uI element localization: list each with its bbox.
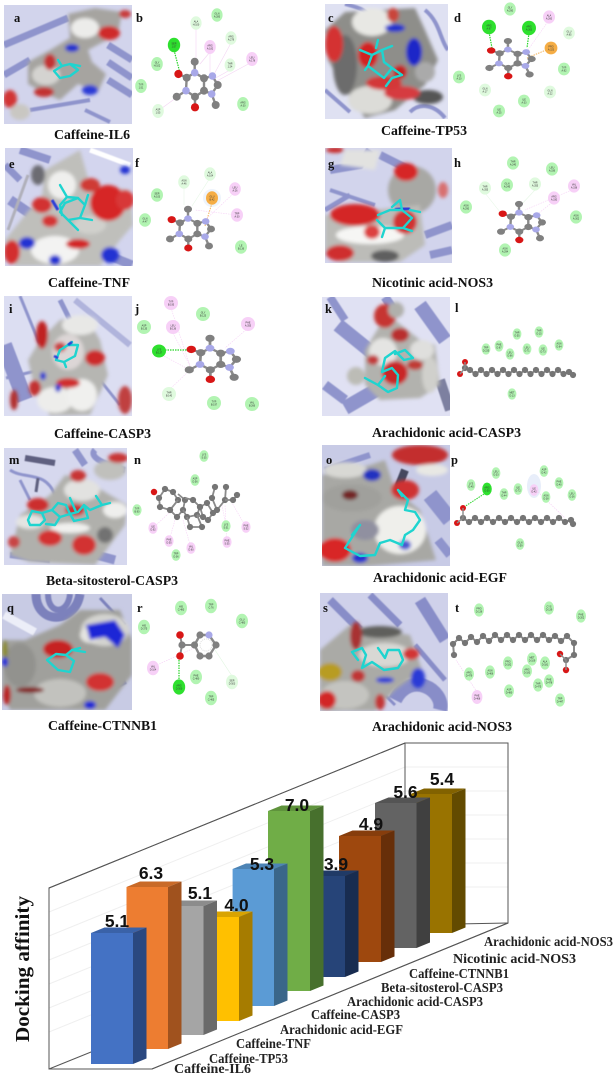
- panel p: Arachidonic acid-EGF interaction diagram: ARG: [484, 486, 490, 490]
- panel l: Arachidonic acid-CASP3 interaction diagram: THR: [537, 330, 541, 332]
- panel l: Arachidonic acid-CASP3 interaction diagram: D:55: [514, 334, 520, 338]
- panel t: Arachidonic acid-NOS3 interaction diagram: D:479: [466, 674, 473, 678]
- label p: p: [451, 453, 458, 467]
- panel d: Caffeine-TP53 interaction diagram: A:22: [548, 92, 553, 96]
- panel d: Caffeine-TP53 interaction diagram: TYR: [562, 66, 566, 70]
- panel q: Caffeine-CTNNB1 docking surface: [2, 594, 132, 710]
- caption: Caffeine-CASP3: Caffeine-CASP3: [54, 426, 151, 441]
- panel d: Caffeine-TP53 interaction diagram: A:97: [487, 28, 492, 30]
- panel t: Arachidonic acid-NOS3 interaction diagram: PRO: [505, 660, 511, 664]
- panel b: Caffeine-IL6 interaction diagram: 1:57: [172, 46, 177, 48]
- panel t: Arachidonic acid-NOS3 interaction diagram: D:468: [474, 698, 481, 700]
- chart: docking affinity 3D bar chart: [12, 743, 613, 1075]
- panel h: Nicotinic acid-NOS3 interaction diagram: A:302: [573, 218, 580, 220]
- panel r: Caffeine-CTNNB1 interaction diagram: D:375: [141, 628, 148, 630]
- panel d: Caffeine-TP53 interaction diagram: GLU: [567, 30, 571, 34]
- label d: d: [454, 11, 461, 25]
- panel h: Nicotinic acid-NOS3 interaction diagram: THR: [511, 160, 515, 164]
- panel r: Caffeine-CTNNB1 interaction diagram: ARG: [176, 684, 182, 688]
- x axis labels: Beta-sitosterol-CASP3: [381, 980, 503, 995]
- panel p: Arachidonic acid-EGF interaction diagram: D:50: [484, 490, 490, 492]
- panel l: Arachidonic acid-CASP3 interaction diagram: D:66: [507, 354, 513, 358]
- label h: h: [454, 156, 461, 170]
- bar: Caffeine-TP53: [126, 882, 182, 1049]
- panel n: Beta-sitosterol-CASP3 interaction diagram: D:56: [192, 480, 198, 484]
- x axis labels: Caffeine-CTNNB1: [409, 966, 509, 981]
- panel f: Caffeine-TNF interaction diagram: B:136: [238, 248, 245, 250]
- panel n: Beta-sitosterol-CASP3 interaction diagram: [132, 450, 251, 561]
- caption: Arachidonic acid-EGF: Arachidonic acid-EGF: [373, 570, 507, 585]
- panel p: Arachidonic acid-EGF interaction diagram: LYS: [469, 482, 473, 486]
- panel l: Arachidonic acid-CASP3 interaction diagram: D:15: [536, 332, 542, 336]
- panel p: Arachidonic acid-EGF interaction diagram: D:72: [515, 490, 521, 492]
- panel b: Caffeine-IL6 interaction diagram: GLY: [155, 62, 159, 64]
- panel t: Arachidonic acid-NOS3 interaction diagram: D:136: [476, 610, 483, 614]
- panel h: Nicotinic acid-NOS3 interaction diagram: A:338: [571, 186, 578, 190]
- x axis labels: Nicotinic acid-NOS3: [453, 951, 576, 966]
- x axis labels: Caffeine-CASP3: [311, 1007, 400, 1022]
- data values: 5.1: [105, 911, 129, 931]
- label n: n: [134, 453, 141, 467]
- panel h: Nicotinic acid-NOS3 interaction diagram: ASN: [464, 204, 468, 208]
- panel n: Beta-sitosterol-CASP3 interaction diagram: D:60: [188, 548, 194, 552]
- panel f: Caffeine-TNF interaction diagram: GLN: [143, 218, 147, 220]
- bar: Caffeine-TNF: [162, 900, 217, 1035]
- panel c: Caffeine-TP53 docking surface: [325, 4, 448, 119]
- panel r: Caffeine-CTNNB1 interaction diagram: C:483: [239, 622, 246, 624]
- panel n: Beta-sitosterol-CASP3 interaction diagram: S:51: [224, 526, 229, 530]
- panel g: Nicotinic acid-NOS3 docking surface: [325, 148, 452, 263]
- panel t: Arachidonic acid-NOS3 interaction diagram: THR: [536, 682, 540, 686]
- panel f: Caffeine-TNF interaction diagram: A:47: [143, 220, 148, 224]
- panel d: Caffeine-TP53 interaction diagram: A:290: [507, 10, 514, 12]
- data values: 4.0: [224, 895, 249, 915]
- panel j: Caffeine-CASP3 interaction diagram: B:195: [168, 304, 175, 306]
- panel f: Caffeine-TNF interaction diagram: TRP: [235, 212, 239, 216]
- label q: q: [7, 601, 14, 615]
- label b: b: [136, 11, 143, 25]
- panel d: Caffeine-TP53 interaction diagram: ALA: [547, 14, 551, 18]
- panel j: Caffeine-CASP3 interaction diagram: B:125: [200, 314, 207, 318]
- panel r: Caffeine-CTNNB1 interaction diagram: PHE: [194, 674, 198, 678]
- panel l: Arachidonic acid-CASP3 interaction diagram: D:73: [540, 350, 546, 354]
- caption: Caffeine-TNF: Caffeine-TNF: [48, 275, 130, 290]
- panel h: Nicotinic acid-NOS3 interaction diagram: GLN: [505, 182, 509, 186]
- caption: Caffeine-CTNNB1: Caffeine-CTNNB1: [48, 718, 157, 733]
- panel d: Caffeine-TP53 interaction diagram: ILE: [497, 108, 501, 112]
- bar: Arachidonic acid-NOS3: [410, 788, 466, 933]
- panel n: Beta-sitosterol-CASP3 interaction diagram: D:92: [150, 528, 156, 532]
- panel d: Caffeine-TP53 interaction diagram: A:20: [457, 78, 462, 80]
- panel d: Caffeine-TP53 interaction diagram: A:25: [497, 112, 502, 114]
- bar: Caffeine-CASP3: [233, 864, 288, 1006]
- panel f: Caffeine-TNF interaction diagram: A:104: [207, 174, 214, 178]
- label e: e: [9, 157, 15, 171]
- panel n: Beta-sitosterol-CASP3 interaction diagram: LYS: [224, 524, 228, 526]
- panel d: Caffeine-TP53 interaction diagram: ARG: [486, 24, 492, 28]
- panel j: Caffeine-CASP3 interaction diagram: TYR: [169, 300, 173, 304]
- panel l: Arachidonic acid-CASP3 interaction diagram: ILE: [541, 348, 545, 350]
- panel t: Arachidonic acid-NOS3 interaction diagram: ASN: [488, 670, 492, 672]
- panel n: Beta-sitosterol-CASP3 interaction diagram: D:55: [166, 542, 172, 544]
- y axis title: Docking affinity: [12, 896, 34, 1042]
- panel p: Arachidonic acid-EGF interaction diagram: PHE: [557, 480, 561, 484]
- panel h: Nicotinic acid-NOS3 interaction diagram: THR: [533, 182, 537, 184]
- panel j: Caffeine-CASP3 interaction diagram: ASP: [142, 324, 146, 328]
- panel f: Caffeine-TNF interaction diagram: [139, 167, 247, 254]
- panel j: Caffeine-CASP3 interaction diagram: B:136: [170, 328, 177, 330]
- label c: c: [328, 11, 334, 25]
- panel d: Caffeine-TP53 interaction diagram: A:92: [562, 70, 567, 72]
- panel t: Arachidonic acid-NOS3 interaction diagram: D:447: [557, 700, 564, 704]
- panel p: Arachidonic acid-EGF interaction diagram: THR: [502, 492, 506, 494]
- panel t: Arachidonic acid-NOS3 interaction diagram: MET: [529, 656, 535, 660]
- panel j: Caffeine-CASP3 interaction diagram: TYR: [212, 400, 216, 404]
- panel b: Caffeine-IL6 interaction diagram: ALA: [194, 20, 198, 24]
- panel r: Caffeine-CTNNB1 interaction diagram: VAL: [151, 666, 155, 668]
- panel b: Caffeine-IL6 interaction diagram: [135, 8, 258, 118]
- caption: Arachidonic acid-NOS3: Arachidonic acid-NOS3: [372, 719, 512, 734]
- panel b: Caffeine-IL6 interaction diagram: H:102: [154, 64, 161, 68]
- panel d: Caffeine-TP53 interaction diagram: LYS: [457, 74, 461, 78]
- panel d: Caffeine-TP53 interaction diagram: A:17: [483, 90, 488, 94]
- panel p: Arachidonic acid-EGF interaction diagram: D:59: [517, 544, 523, 548]
- panel d: Caffeine-TP53 interaction diagram: A:33: [522, 102, 527, 104]
- panel h: Nicotinic acid-NOS3 interaction diagram: VAL: [572, 184, 576, 186]
- x axis labels: Caffeine-TNF: [236, 1036, 311, 1051]
- panel l: Arachidonic acid-CASP3 interaction diagram: D:13: [509, 394, 515, 398]
- x axis labels: Arachidonic acid-EGF: [280, 1022, 403, 1037]
- panel j: Caffeine-CASP3 interaction diagram: [137, 296, 259, 411]
- panel j: Caffeine-CASP3 interaction diagram: LYS: [157, 348, 161, 352]
- label i: i: [9, 302, 13, 316]
- panel n: Beta-sitosterol-CASP3 interaction diagram: B:90: [135, 510, 140, 514]
- panel h: Nicotinic acid-NOS3 interaction diagram: [460, 156, 582, 257]
- panel i: Caffeine-CASP3 docking surface: [4, 296, 132, 416]
- caption: Nicotinic acid-NOS3: Nicotinic acid-NOS3: [372, 275, 493, 290]
- panel b: Caffeine-IL6 interaction diagram: ARG: [240, 102, 246, 104]
- panel f: Caffeine-TNF interaction diagram: B:42: [210, 198, 215, 202]
- panel r: Caffeine-CTNNB1 interaction diagram: D:503: [229, 682, 236, 686]
- panel j: Caffeine-CASP3 interaction diagram: B:266: [249, 404, 256, 408]
- panel j: Caffeine-CASP3 interaction diagram: GLY: [201, 312, 205, 314]
- panel h: Nicotinic acid-NOS3 interaction diagram: ASN: [503, 248, 507, 250]
- bar: Arachidonic acid-EGF: [197, 912, 252, 1021]
- panel f: Caffeine-TNF interaction diagram: A:26: [233, 190, 238, 192]
- panel t: Arachidonic acid-NOS3 interaction diagram: D:182: [505, 664, 512, 666]
- x axis labels: Caffeine-TP53: [209, 1051, 288, 1066]
- data values: 6.3: [139, 863, 163, 883]
- panel f: Caffeine-TNF interaction diagram: SER: [155, 192, 159, 196]
- panel h: Nicotinic acid-NOS3 interaction diagram: ARG: [551, 196, 557, 198]
- panel p: Arachidonic acid-EGF interaction diagram: ILE: [516, 486, 520, 490]
- panel n: Beta-sitosterol-CASP3 interaction diagram: S:52: [244, 528, 249, 530]
- panel h: Nicotinic acid-NOS3 interaction diagram: A:240: [510, 164, 517, 166]
- data values: 5.4: [430, 769, 454, 789]
- panel r: Caffeine-CTNNB1 interaction diagram: SER: [230, 680, 234, 682]
- panel t: Arachidonic acid-NOS3 interaction diagram: PRO: [476, 608, 482, 610]
- panel l: Arachidonic acid-CASP3 interaction diagram: ASN: [557, 342, 561, 346]
- panel f: Caffeine-TNF interaction diagram: GLU: [210, 196, 214, 198]
- panel t: Arachidonic acid-NOS3 interaction diagram: D:139: [546, 608, 553, 612]
- panel l: Arachidonic acid-CASP3 interaction diagram: D:235: [483, 350, 490, 352]
- panel t: Arachidonic acid-NOS3 interaction diagram: D:183: [524, 672, 531, 674]
- panel d: Caffeine-TP53 interaction diagram: GLN: [483, 88, 487, 90]
- panel b: Caffeine-IL6 interaction diagram: TYR: [139, 84, 143, 86]
- panel t: Arachidonic acid-NOS3 interaction diagram: D:480: [506, 692, 513, 694]
- panel p: Arachidonic acid-EGF interaction diagram: LEU: [570, 492, 574, 496]
- label m: m: [9, 453, 20, 467]
- panel j: Caffeine-CASP3 interaction diagram: LEU: [171, 324, 175, 328]
- panel f: Caffeine-TNF interaction diagram: LEU: [233, 186, 237, 190]
- panel b: Caffeine-IL6 interaction diagram: 1:24: [228, 66, 233, 68]
- panel a: Caffeine-IL6 docking surface: [4, 5, 132, 124]
- panel p: Arachidonic acid-EGF interaction diagram: ASN: [544, 494, 548, 498]
- panel r: Caffeine-CTNNB1 interaction diagram: TRP: [209, 696, 213, 698]
- label a: a: [14, 11, 21, 25]
- panel d: Caffeine-TP53 interaction diagram: A:323: [548, 48, 555, 52]
- bar: Caffeine-IL6: [91, 928, 146, 1064]
- panel d: Caffeine-TP53 interaction diagram: [453, 2, 575, 117]
- panel p: Arachidonic acid-EGF interaction diagram: ASP: [542, 468, 546, 472]
- panel l: Arachidonic acid-CASP3 interaction diagram: THR: [515, 332, 519, 334]
- panel d: Caffeine-TP53 interaction diagram: PRO: [548, 46, 554, 48]
- panel p: Arachidonic acid-EGF interaction diagram: [454, 465, 576, 550]
- label o: o: [326, 453, 332, 467]
- panel d: Caffeine-TP53 interaction diagram: ARG: [526, 26, 532, 28]
- label l: l: [455, 301, 459, 315]
- panel r: Caffeine-CTNNB1 interaction diagram: TRP: [209, 604, 213, 606]
- panel n: Beta-sitosterol-CASP3 interaction diagram: ASP: [193, 478, 197, 480]
- panel n: Beta-sitosterol-CASP3 interaction diagram: D:06: [173, 556, 179, 558]
- panel n: Beta-sitosterol-CASP3 interaction diagram: TRP: [174, 552, 178, 556]
- panel p: Arachidonic acid-EGF interaction diagram: D:44: [501, 494, 507, 498]
- bar: Beta-sitosterol-CASP3: [303, 870, 358, 977]
- panel b: Caffeine-IL6 interaction diagram: A:279: [228, 38, 235, 42]
- panel f: Caffeine-TNF interaction diagram: A:30: [235, 216, 240, 218]
- panel n: Beta-sitosterol-CASP3 interaction diagram: PHE: [225, 540, 229, 542]
- label f: f: [135, 156, 140, 170]
- panel b: Caffeine-IL6 interaction diagram: A:178: [249, 60, 256, 62]
- panel d: Caffeine-TP53 interaction diagram: GLY: [508, 6, 512, 10]
- panel n: Beta-sitosterol-CASP3 interaction diagram: TYR: [135, 508, 139, 510]
- panel r: Caffeine-CTNNB1 interaction diagram: [138, 599, 248, 705]
- caption: Beta-sitosterol-CASP3: Beta-sitosterol-CASP3: [46, 573, 178, 588]
- panel f: Caffeine-TNF interaction diagram: A:46: [182, 182, 187, 186]
- panel h: Nicotinic acid-NOS3 interaction diagram: LEU: [550, 166, 554, 170]
- panel b: Caffeine-IL6 interaction diagram: LEU: [250, 56, 254, 60]
- panel b: Caffeine-IL6 interaction diagram: ASP: [156, 108, 160, 112]
- panel j: Caffeine-CASP3 interaction diagram: PHE: [246, 322, 250, 324]
- bar: Nicotinic acid-NOS3: [375, 798, 430, 948]
- panel p: Arachidonic acid-EGF interaction diagram: GLN: [518, 542, 522, 544]
- panel r: Caffeine-CTNNB1 interaction diagram: HIS: [142, 624, 146, 628]
- panel o: Arachidonic acid-EGF docking surface: [322, 445, 450, 566]
- panel l: Arachidonic acid-CASP3 interaction diagram: [457, 326, 573, 400]
- panel r: Caffeine-CTNNB1 interaction diagram: D:500: [176, 688, 183, 690]
- panel t: Arachidonic acid-NOS3 interaction diagram: ALA: [543, 660, 547, 664]
- panel h: Nicotinic acid-NOS3 interaction diagram: A:330: [551, 198, 558, 202]
- caption: Caffeine-IL6: Caffeine-IL6: [54, 127, 130, 142]
- label k: k: [325, 302, 332, 316]
- data values: 5.1: [188, 883, 212, 903]
- panel p: Arachidonic acid-EGF interaction diagram: D:45: [468, 486, 474, 488]
- panel t: Arachidonic acid-NOS3 interaction diagram: D:109: [529, 660, 536, 662]
- panel h: Nicotinic acid-NOS3 interaction diagram: A:336: [549, 170, 556, 172]
- panel l: Arachidonic acid-CASP3 interaction diagram: PHE: [497, 344, 501, 346]
- panel l: Arachidonic acid-CASP3 interaction diagram: D:64: [556, 346, 562, 348]
- panel h: Nicotinic acid-NOS3 interaction diagram: A:355: [482, 188, 489, 192]
- panel r: Caffeine-CTNNB1 interaction diagram: D:104: [150, 668, 157, 672]
- panel b: Caffeine-IL6 interaction diagram: A:283: [214, 16, 221, 18]
- panel t: Arachidonic acid-NOS3 interaction diagram: PHE: [547, 678, 551, 682]
- panel r: Caffeine-CTNNB1 interaction diagram: C:483: [178, 608, 185, 612]
- label g: g: [328, 157, 335, 171]
- panel l: Arachidonic acid-CASP3 interaction diagram: D:67: [496, 346, 502, 350]
- panel p: Arachidonic acid-EGF interaction diagram: D:42: [531, 490, 537, 494]
- panel t: Arachidonic acid-NOS3 interaction diagram: D:202: [578, 616, 585, 620]
- panel h: Nicotinic acid-NOS3 interaction diagram: THR: [483, 186, 487, 188]
- panel d: Caffeine-TP53 interaction diagram: A:260: [546, 18, 553, 20]
- panel f: Caffeine-TNF interaction diagram: ASN: [182, 180, 186, 182]
- panel p: Arachidonic acid-EGF interaction diagram: D:36: [569, 496, 575, 498]
- panel t: Arachidonic acid-NOS3 interaction diagram: [453, 601, 586, 707]
- panel p: Arachidonic acid-EGF interaction diagram: ILE: [532, 488, 536, 490]
- panel l: Arachidonic acid-CASP3 interaction diagram: D:71: [524, 350, 530, 352]
- panel b: Caffeine-IL6 interaction diagram: A:182: [207, 48, 214, 50]
- data values: 7.0: [285, 795, 309, 815]
- panel t: Arachidonic acid-NOS3 interaction diagram: ARG: [466, 672, 472, 674]
- caption: Arachidonic acid-CASP3: Arachidonic acid-CASP3: [372, 425, 521, 440]
- panel t: Arachidonic acid-NOS3 interaction diagram: TRP: [558, 698, 562, 700]
- label r: r: [137, 601, 143, 615]
- caption: Caffeine-TP53: Caffeine-TP53: [381, 123, 467, 138]
- panel p: Arachidonic acid-EGF interaction diagram: D:38: [543, 498, 549, 500]
- data values: 5.6: [393, 782, 418, 802]
- label s: s: [323, 601, 328, 615]
- panel l: Arachidonic acid-CASP3 interaction diagram: MET: [509, 392, 515, 394]
- x axis labels: Arachidonic acid-CASP3: [347, 994, 483, 1009]
- panel t: Arachidonic acid-NOS3 interaction diagram: D:181: [542, 664, 549, 666]
- bar: Caffeine-CTNNB1: [339, 830, 394, 962]
- label t: t: [455, 601, 460, 615]
- panel f: Caffeine-TNF interaction diagram: ALA: [208, 172, 212, 174]
- panel b: Caffeine-IL6 interaction diagram: GLN: [215, 12, 219, 16]
- panel h: Nicotinic acid-NOS3 interaction diagram: A:294: [502, 250, 509, 254]
- panel t: Arachidonic acid-NOS3 interaction diagram: D:478: [546, 682, 553, 684]
- panel h: Nicotinic acid-NOS3 interaction diagram: A:290: [463, 208, 470, 210]
- panel b: Caffeine-IL6 interaction diagram: SER: [172, 42, 176, 46]
- data values: 4.9: [359, 814, 383, 834]
- panel d: Caffeine-TP53 interaction diagram: ILE: [522, 98, 526, 102]
- panel l: Arachidonic acid-CASP3 interaction diagram: LEU: [525, 346, 529, 350]
- panel m: Beta-sitosterol-CASP3 docking surface: [4, 448, 127, 565]
- panel t: Arachidonic acid-NOS3 interaction diagram: PHE: [475, 694, 479, 698]
- panel r: Caffeine-CTNNB1 interaction diagram: C:480: [193, 678, 200, 680]
- panel n: Beta-sitosterol-CASP3 interaction diagram: LYS: [202, 454, 206, 456]
- panel f: Caffeine-TNF interaction diagram: LE: [240, 244, 242, 248]
- panel j: Caffeine-CASP3 interaction diagram: B:197: [211, 404, 218, 406]
- panel t: Arachidonic acid-NOS3 interaction diagram: ASP: [507, 688, 511, 692]
- panel j: Caffeine-CASP3 interaction diagram: B:135: [141, 328, 148, 330]
- panel h: Nicotinic acid-NOS3 interaction diagram: ASN: [574, 214, 578, 218]
- x axis labels: [174, 934, 613, 1075]
- panel b: Caffeine-IL6 interaction diagram: 1:55: [156, 112, 161, 114]
- panel p: Arachidonic acid-EGF interaction diagram: LEU: [494, 470, 498, 474]
- panel l: Arachidonic acid-CASP3 interaction diagram: TRP: [484, 346, 488, 350]
- panel s: Arachidonic acid-NOS3 docking surface: [320, 593, 448, 711]
- data values: 5.3: [250, 854, 274, 874]
- panel p: Arachidonic acid-EGF interaction diagram: D:40: [556, 484, 562, 486]
- panel b: Caffeine-IL6 interaction diagram: ARG: [207, 44, 213, 48]
- panel b: Caffeine-IL6 interaction diagram: 1:51: [139, 86, 144, 90]
- panel j: Caffeine-CASP3 interaction diagram: THR: [167, 392, 171, 394]
- panel t: Arachidonic acid-NOS3 interaction diagram: D:466: [487, 672, 494, 676]
- panel t: Arachidonic acid-NOS3 interaction diagram: PHE: [579, 614, 583, 616]
- panel b: Caffeine-IL6 interaction diagram: A:30: [241, 104, 246, 108]
- data values: [105, 769, 454, 931]
- panel d: Caffeine-TP53 interaction diagram: A:303: [526, 28, 533, 32]
- panel b: Caffeine-IL6 interaction diagram: H:100: [193, 24, 200, 26]
- panel k: Arachidonic acid-CASP3 docking surface: [322, 297, 450, 416]
- panel j: Caffeine-CASP3 interaction diagram: B:137: [156, 352, 163, 354]
- panel t: Arachidonic acid-NOS3 interaction diagram: CYS: [547, 606, 551, 608]
- panel p: Arachidonic acid-EGF interaction diagram: D:33: [493, 474, 499, 476]
- panel t: Arachidonic acid-NOS3 interaction diagram: D:475: [535, 686, 542, 688]
- panel r: Caffeine-CTNNB1 interaction diagram: C:465: [208, 698, 215, 702]
- panel r: Caffeine-CTNNB1 interaction diagram: GLU: [240, 618, 244, 622]
- panel j: Caffeine-CASP3 interaction diagram: B:140: [166, 394, 173, 398]
- panel l: Arachidonic acid-CASP3 interaction diagram: LEU: [508, 352, 512, 354]
- panel r: Caffeine-CTNNB1 interaction diagram: C:76: [208, 606, 214, 610]
- panel d: Caffeine-TP53 interaction diagram: GLN: [548, 90, 552, 92]
- panel d: Caffeine-TP53 interaction diagram: A:85: [567, 34, 572, 36]
- panel r: Caffeine-CTNNB1 interaction diagram: HIS: [179, 606, 183, 608]
- panel b: Caffeine-IL6 interaction diagram: THR: [228, 62, 232, 66]
- panel n: Beta-sitosterol-CASP3 interaction diagram: ILE: [151, 526, 155, 528]
- panel n: Beta-sitosterol-CASP3 interaction diagram: S:55: [225, 542, 230, 546]
- data values: 3.9: [324, 854, 348, 874]
- panel j: Caffeine-CASP3 interaction diagram: VAL: [250, 402, 254, 404]
- panel b: Caffeine-IL6 interaction diagram: ARG: [228, 36, 234, 38]
- panel p: Arachidonic acid-EGF interaction diagram: D:42: [541, 472, 547, 474]
- panel n: Beta-sitosterol-CASP3 interaction diagram: VAL: [189, 546, 193, 548]
- panel f: Caffeine-TNF interaction diagram: A:103: [154, 196, 161, 198]
- panel n: Beta-sitosterol-CASP3 interaction diagram: PHE: [244, 524, 248, 528]
- panel n: Beta-sitosterol-CASP3 interaction diagram: PHE: [167, 538, 171, 542]
- panel j: Caffeine-CASP3 interaction diagram: A:355: [245, 324, 252, 328]
- label j: j: [134, 302, 139, 316]
- panel e: Caffeine-TNF docking surface: [5, 148, 133, 266]
- chart frame: [49, 743, 508, 1069]
- panel t: Arachidonic acid-NOS3 interaction diagram: ARG: [524, 668, 530, 672]
- bar: Arachidonic acid-CASP3: [268, 806, 324, 991]
- panel h: Nicotinic acid-NOS3 interaction diagram: A:355: [532, 184, 539, 188]
- panel n: Beta-sitosterol-CASP3 interaction diagram: S:35: [202, 456, 207, 460]
- panel h: Nicotinic acid-NOS3 interaction diagram: A:245: [504, 186, 511, 188]
